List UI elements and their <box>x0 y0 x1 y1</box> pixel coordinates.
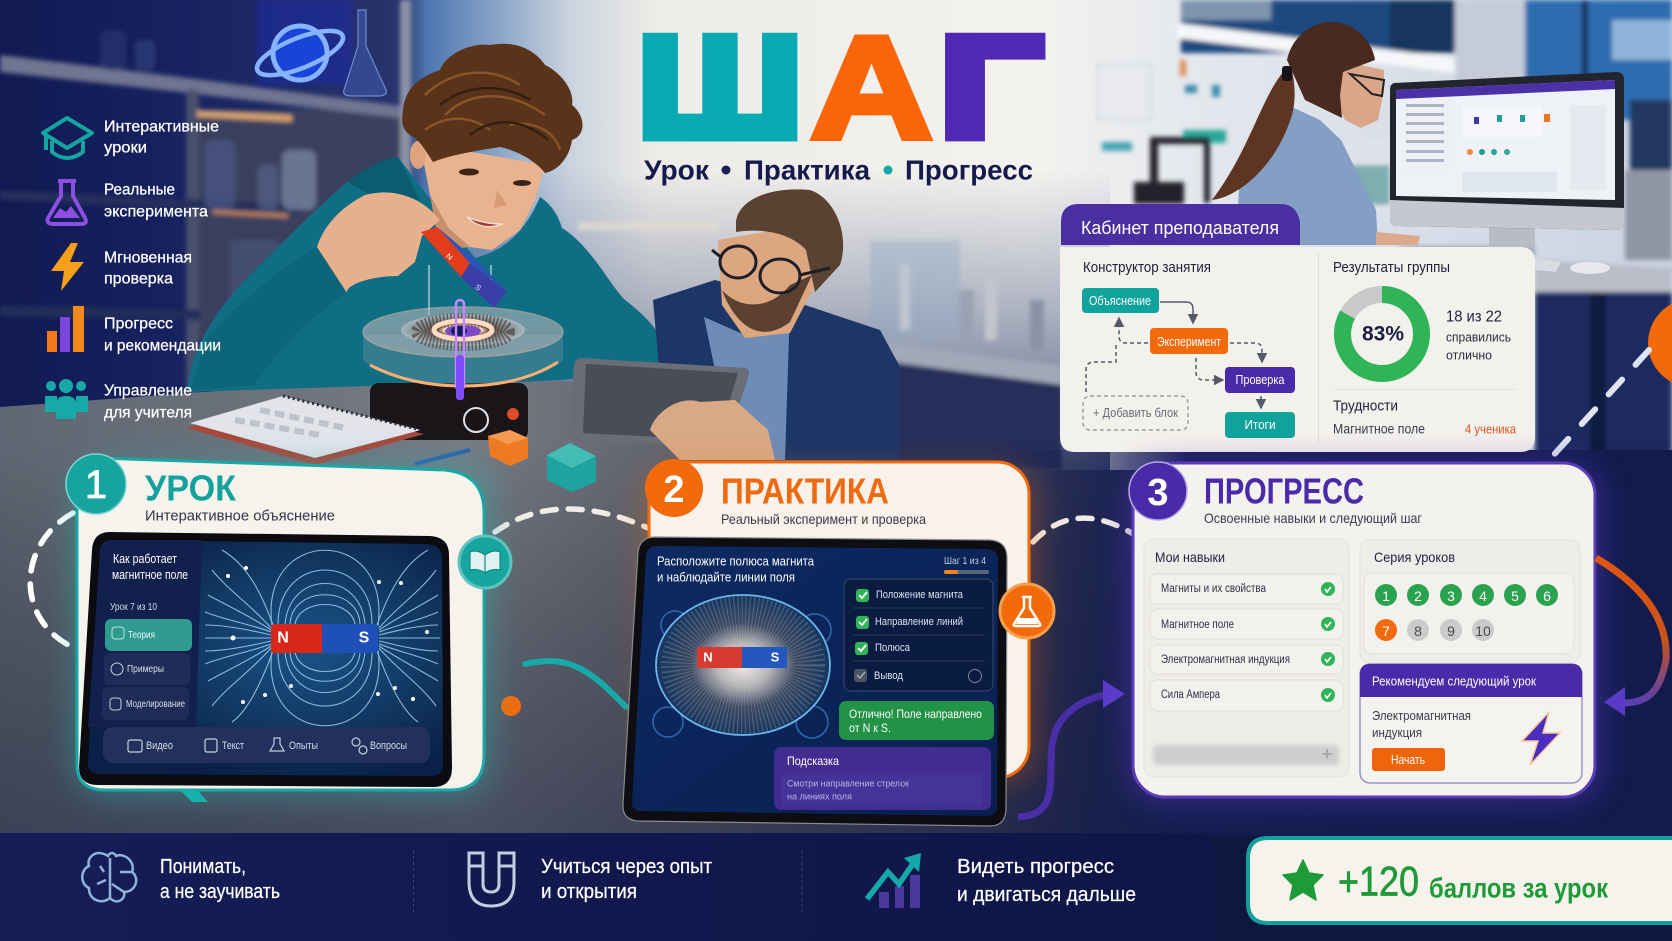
tablet: interactive lesson: Теория <box>128 629 155 641</box>
my skills: Мои навыки <box>1155 549 1225 565</box>
illustration: teacher <box>653 189 899 460</box>
lesson builder: Итоги <box>1244 418 1276 432</box>
hint: на линиях поля <box>787 792 852 802</box>
number badge: 1 <box>85 463 107 507</box>
label: instant check <box>104 250 192 288</box>
lesson series: 9 <box>1447 623 1455 639</box>
purple curved arrow <box>1018 680 1125 817</box>
tablet: interactive lesson: Примеры <box>127 663 164 675</box>
subtitle: Прогресс <box>905 154 1033 186</box>
recommended next lesson: индукция <box>1372 726 1422 740</box>
hint: Подсказка <box>787 754 839 768</box>
label: interactive lessons: уроки <box>104 140 147 156</box>
lesson builder: Эксперимент <box>1157 335 1221 349</box>
lesson series: 2 <box>1414 588 1422 604</box>
label: interactive lessons <box>104 118 219 156</box>
tablet: interactive lesson: магнитное поле <box>112 568 188 582</box>
my skills: Магниты и их свойства <box>1161 583 1267 595</box>
illustration: teacher at the monitor <box>1212 22 1420 245</box>
bottom toolbar <box>103 727 430 763</box>
checklist: Вывод <box>874 670 904 682</box>
icon: lightning bolt <box>51 243 84 291</box>
experiment disc: N <box>703 650 713 664</box>
tablet: interactive lesson: Моделирование <box>126 698 185 710</box>
label: teacher management: для учителя <box>104 404 192 422</box>
benefit text 1 <box>160 856 280 903</box>
benefit text 2 <box>541 856 712 903</box>
neck and face <box>420 143 545 250</box>
group results: Трудности <box>1333 398 1398 414</box>
icon: group of people <box>45 379 88 419</box>
shelves at left <box>0 0 411 410</box>
subheading: Реальный эксперимент и проверка <box>721 511 926 527</box>
checklist: Полюса <box>875 642 911 654</box>
icon: star <box>1283 860 1323 900</box>
lesson builder: Объяснение <box>1089 294 1151 308</box>
tablet: interactive lesson: Вопросы <box>370 740 407 752</box>
group results: Результаты группы <box>1333 260 1450 276</box>
tablet: experiment: и наблюдайте линии поля <box>657 570 795 584</box>
lab at right <box>1097 0 1672 472</box>
panel: step 3 progress <box>1125 460 1605 805</box>
label: progress and recommendations: и рекомендации <box>104 338 221 354</box>
menu buttons <box>105 619 192 651</box>
label: teacher management <box>104 382 192 422</box>
my skills <box>1144 539 1349 777</box>
magnet: N <box>277 630 289 646</box>
number badge: 3 <box>1147 472 1169 514</box>
lesson series <box>1360 540 1580 663</box>
tablet: interactive lesson: Урок 7 из 10 <box>110 601 157 613</box>
hint: Смотри направление стрелок <box>787 778 910 790</box>
label: progress and recommendations: Прогресс <box>104 316 173 332</box>
recommended next lesson <box>1360 664 1582 783</box>
heading: УРОК <box>145 468 237 508</box>
number badge <box>645 459 703 517</box>
recommended next lesson: Рекомендуем следующий урок <box>1372 674 1536 688</box>
hand <box>317 192 440 293</box>
lesson builder: Проверка <box>1236 373 1285 387</box>
benefit text 3 <box>957 856 1136 906</box>
lab bench in the centre <box>578 222 1062 470</box>
checklist: Направление линий <box>875 616 963 628</box>
tablet: interactive lesson: Как работает <box>113 552 177 566</box>
card body <box>1133 463 1595 797</box>
subtitle: Урок <box>644 154 710 186</box>
title ШАГ: Г <box>940 8 1042 167</box>
checklist <box>844 579 993 691</box>
teal cube <box>547 443 596 492</box>
hint <box>774 747 991 810</box>
panel body <box>1060 247 1535 452</box>
checklist: Положение магнита <box>876 589 964 601</box>
magnet: S <box>359 630 370 646</box>
decorative orange circle at right edge <box>1648 299 1672 387</box>
icon: graduation cap <box>43 118 92 158</box>
experiment disc <box>653 595 831 738</box>
my skills: Магнитное поле <box>1161 619 1234 631</box>
label: instant check: Мгновенная <box>104 250 192 266</box>
label: instant check: проверка <box>104 270 173 288</box>
bottom benefits band <box>0 833 1215 941</box>
subtitle: Практика <box>744 154 870 186</box>
benefit text 2: Учиться через опыт <box>541 856 712 878</box>
dividers <box>414 850 802 913</box>
orange curved arrow <box>1596 558 1666 716</box>
lesson builder <box>1082 260 1295 438</box>
magnet <box>271 624 378 653</box>
benefit text 1: а не заучивать <box>160 881 280 903</box>
lesson series: 1 <box>1382 588 1390 604</box>
mouse <box>1570 262 1610 274</box>
card body <box>77 458 484 790</box>
computer monitor <box>1390 72 1624 247</box>
title ШАГ: А <box>810 6 933 169</box>
experiment device with glowing disc <box>363 300 563 440</box>
my skills: Сила Ампера <box>1161 689 1220 701</box>
hair <box>402 44 583 173</box>
lesson series: 5 <box>1511 588 1519 604</box>
subheading: Интерактивное объяснение <box>145 508 335 524</box>
magnet held by student: S <box>473 283 483 293</box>
dashed connector into card 1 <box>30 513 79 650</box>
heading: ПРОГРЕСС <box>1204 470 1364 512</box>
heading: ПРАКТИКА <box>721 470 889 512</box>
group results: 4 ученика <box>1465 422 1517 436</box>
icon: horseshoe magnet <box>469 853 514 906</box>
success message: Отлично! Поле направлено <box>849 707 982 721</box>
panel: step 1 lesson <box>66 454 511 802</box>
orange cube <box>488 430 528 466</box>
label: interactive lessons: Интерактивные <box>104 118 219 136</box>
label: real experiments: Реальные <box>104 182 175 198</box>
icon: neon planet <box>252 0 353 85</box>
points caption: баллов за урок <box>1429 872 1609 904</box>
icon: growth chart <box>867 853 921 908</box>
label: real experiments <box>104 182 208 220</box>
title ШАГ <box>638 6 1042 169</box>
lesson series: 3 <box>1447 588 1455 604</box>
group results <box>1333 260 1517 436</box>
left feature list <box>43 118 221 422</box>
tablet: interactive lesson: Текст <box>222 740 244 752</box>
subtitle <box>644 154 1033 186</box>
illustration: student <box>187 44 671 392</box>
lesson series: 7 <box>1382 623 1390 639</box>
benefit text 3: и двигаться дальше <box>957 884 1136 906</box>
success message <box>839 701 994 740</box>
success message: от N к S. <box>849 721 891 735</box>
recommended next lesson: Электромагнитная <box>1372 709 1471 723</box>
lesson series: 6 <box>1543 588 1551 604</box>
group results: 83% <box>1362 322 1404 346</box>
glass flask on shelf <box>344 10 386 96</box>
lesson series: 4 <box>1479 588 1487 604</box>
tablet held by teacher <box>570 358 775 460</box>
points badge <box>1248 838 1672 923</box>
benefit text 2: и открытия <box>541 881 637 903</box>
lesson builder: + Добавить блок <box>1093 406 1178 420</box>
title ШАГ: Ш <box>638 8 802 167</box>
label: real experiments: эксперимента <box>104 204 208 220</box>
group results: справились <box>1446 330 1511 344</box>
icon: brain <box>82 853 136 901</box>
orange dot <box>501 696 521 716</box>
benefit text 1: Понимать, <box>160 856 246 878</box>
group results: 18 из 22 <box>1446 308 1502 326</box>
label: progress and recommendations <box>104 316 221 354</box>
magnetic field chart <box>205 550 440 726</box>
my skills: + <box>1322 744 1332 764</box>
number badge <box>66 454 126 514</box>
hoodie <box>187 157 671 392</box>
icon: flask badge <box>1000 584 1054 638</box>
teal connector <box>525 661 626 707</box>
dashed connector between card 1 and card 2 <box>495 509 648 532</box>
desk floor <box>0 380 1672 840</box>
points value: +120 <box>1338 858 1419 904</box>
icon: lightning <box>1522 712 1560 765</box>
subheading: Освоенные навыки и следующий шаг <box>1204 510 1422 526</box>
tab header <box>1061 204 1300 245</box>
number badge <box>1129 462 1187 520</box>
magnet held by student: N <box>444 252 454 262</box>
tablet: interactive lesson: Видео <box>146 740 173 752</box>
panel: teacher cabinet <box>1060 204 1535 452</box>
experiment disc: S <box>771 650 780 664</box>
notebook <box>187 396 424 465</box>
lesson builder: Конструктор занятия <box>1083 260 1211 276</box>
tablet: experiment <box>623 537 1007 826</box>
tablet: interactive lesson: Опыты <box>289 740 318 752</box>
sidebar <box>88 540 202 727</box>
label: teacher management: Управление <box>104 382 192 400</box>
tablet: interactive lesson <box>79 532 452 787</box>
my skills: Электромагнитная индукция <box>1161 654 1290 666</box>
lesson series: Серия уроков <box>1374 549 1455 565</box>
dashed connector between card 2 and card 3 <box>1033 518 1135 542</box>
icon: progress bars <box>47 306 84 352</box>
step indicator: Шаг 1 из 4 <box>944 555 986 567</box>
icon: flask <box>48 181 86 224</box>
magnet held by student <box>421 227 510 308</box>
keyboard <box>1535 258 1561 272</box>
dashed connector from cabinet <box>1540 350 1649 470</box>
card body <box>649 462 1029 778</box>
card tail <box>180 790 208 802</box>
group results: отлично <box>1446 348 1492 362</box>
step indicator <box>944 555 989 574</box>
lesson series: 10 <box>1475 623 1491 639</box>
lesson series: 8 <box>1414 623 1422 639</box>
pen <box>415 450 470 464</box>
group results: Магнитное поле <box>1333 422 1425 436</box>
recommended next lesson: Начать <box>1391 753 1425 767</box>
tablet: experiment: Расположите полюса магнита <box>657 554 815 568</box>
heading: Кабинет преподавателя <box>1081 218 1279 238</box>
icon: book badge <box>459 536 511 588</box>
number badge: 2 <box>663 469 685 511</box>
panel: step 2 practice <box>623 459 1054 826</box>
benefit text 3: Видеть прогресс <box>957 856 1114 878</box>
